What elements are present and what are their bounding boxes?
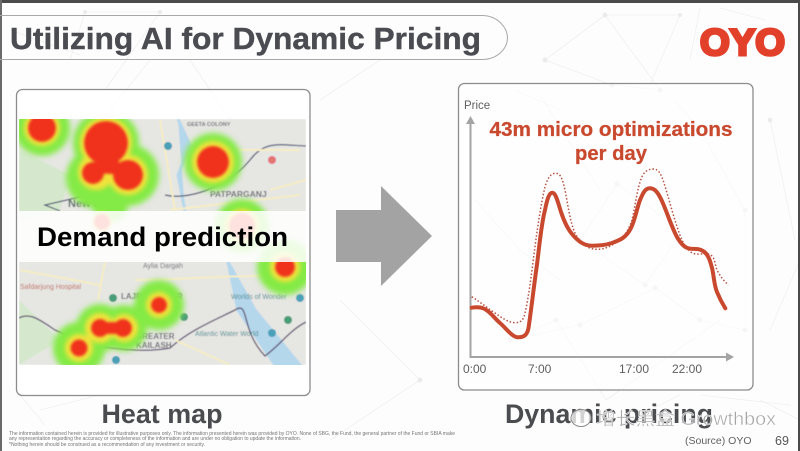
x axis labels: 0:00 — [463, 362, 487, 376]
disclaimer: any representation regarding the accuracy or completeness of the information and are under no obligation to update the information. — [9, 436, 301, 442]
panel: dynamic pricing chart — [458, 84, 753, 390]
demand prediction band: Demand prediction — [37, 222, 288, 252]
axes — [466, 116, 734, 362]
source: (Source) OYO — [685, 435, 752, 447]
solid price curve — [472, 188, 725, 337]
heading: heat map: Heat map — [102, 399, 222, 429]
heat map image: Atlantic Water World — [195, 331, 259, 338]
heat map image: Safdarjung Hospital — [20, 284, 82, 291]
title: Utilizing AI for Dynamic Pricing — [10, 21, 481, 56]
watermark: 增长黑盒 Growthbox — [596, 409, 776, 429]
axis label: price: Price — [464, 100, 490, 112]
x axis labels: 22:00 — [672, 362, 702, 376]
heat map image: PATPARGANJ — [210, 189, 267, 199]
heat map image: New Delhi — [68, 198, 121, 210]
chart callout: per day — [575, 143, 648, 165]
heat map image — [19, 119, 306, 365]
heat map image: KAILASH — [136, 341, 172, 350]
heading: dynamic pricing: Dynamic pricing — [505, 399, 713, 429]
x axis labels: 7:00 — [528, 362, 552, 376]
heat map image: Aylia Dargah — [143, 263, 183, 270]
dotted forecast curve — [472, 169, 728, 323]
heat map image: Worlds of Wonder — [231, 294, 287, 301]
chart callout — [490, 119, 732, 165]
disclaimer: *Nothing herein should be construed as a recommendation of any investment or security. — [9, 442, 205, 448]
demand prediction band — [19, 211, 306, 262]
heat map image: GEETA COLONY — [187, 122, 231, 128]
disclaimer — [9, 431, 455, 448]
chart callout: 43m micro optimizations — [490, 119, 732, 141]
heat blobs — [19, 119, 306, 365]
disclaimer: The information contained herein is provided for illustrative purposes only. The information presented herein was provided by OYO. None of SBG, the Fund, the general partner of the Fund or SBIA make — [9, 431, 455, 437]
logo: OYO: OYO — [700, 22, 785, 63]
x axis labels — [463, 362, 702, 376]
panel: heat map — [14, 90, 313, 396]
heat map image: GREATER — [136, 332, 175, 341]
heat map image: LAJPAT NAGAR — [121, 292, 183, 301]
page number: 69 — [775, 434, 789, 448]
x axis labels: 17:00 — [619, 362, 649, 376]
arrow — [336, 186, 432, 286]
